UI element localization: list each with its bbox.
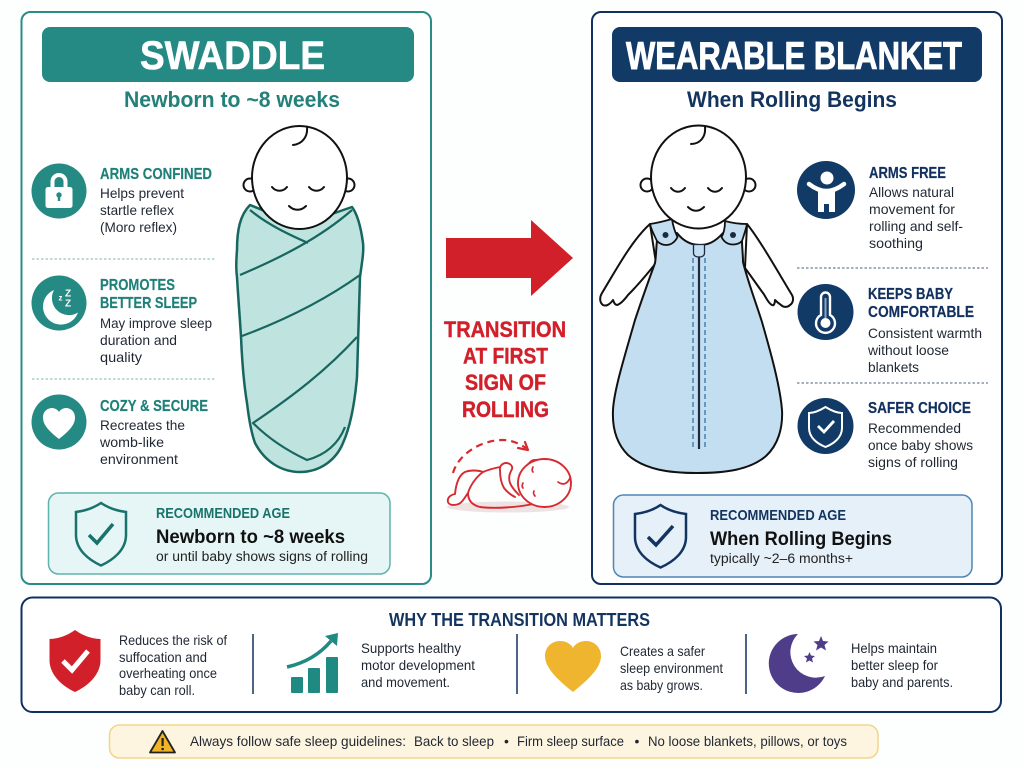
recommended age: swaddle <box>48 493 390 574</box>
transition message: AT FIRST <box>463 344 548 368</box>
recommended age: wearable blanket: RECOMMENDED AGE <box>710 507 846 524</box>
benefit: arms free: Allows natural <box>869 184 954 200</box>
benefit: safer choice <box>868 400 973 470</box>
illustration: baby in sleep sack <box>600 126 793 473</box>
benefit: safer choice: Recommended <box>868 420 961 436</box>
reason: reduces risk: suffocation and <box>119 649 207 665</box>
transition message: ROLLING <box>462 397 549 422</box>
benefit: keeps baby comfortable: COMFORTABLE <box>868 304 974 321</box>
recommended age: swaddle: RECOMMENDED AGE <box>156 505 290 522</box>
wearable blanket header banner <box>612 27 982 82</box>
benefit: arms free: ARMS FREE <box>869 165 946 182</box>
reason: motor development: and movement. <box>361 674 450 690</box>
reason: motor development <box>361 640 475 690</box>
wearable blanket subtitle: When Rolling Begins <box>687 87 897 112</box>
transition message: SIGN OF <box>465 370 546 395</box>
sack body <box>613 233 782 473</box>
callout: safe sleep guidelines: • <box>504 733 509 749</box>
benefit: cozy and secure <box>99 398 208 467</box>
section heading: WHY THE TRANSITION MATTERS <box>389 610 650 630</box>
icon: moon and zzz <box>32 276 86 330</box>
benefit: arms confined: (Moro reflex) <box>100 219 177 235</box>
callout: safe sleep guidelines: Always follow safe sleep guidelines: <box>190 733 406 749</box>
benefit: safer choice: SAFER CHOICE <box>868 400 971 417</box>
zipper <box>693 244 705 449</box>
reason: motor development: motor development <box>361 657 475 673</box>
illustration: baby rolling <box>447 440 571 512</box>
reason: motor development: Supports healthy <box>361 640 461 656</box>
reason: reduces risk: baby can roll. <box>119 682 195 698</box>
benefit: arms free: soothing <box>869 235 923 251</box>
benefit: arms free <box>869 165 963 251</box>
swaddle header banner <box>42 27 414 82</box>
transition message: TRANSITION <box>444 317 566 342</box>
straps and buttons <box>650 219 747 245</box>
reason: better sleep <box>851 640 953 690</box>
icon: warning triangle <box>150 731 175 752</box>
benefit: cozy and secure: Recreates the <box>100 417 185 433</box>
reason: safer environment: sleep environment <box>620 660 723 676</box>
arrow: transition <box>446 220 573 296</box>
callout: safe sleep guidelines: • <box>634 733 640 749</box>
benefit: promotes better sleep: quality <box>100 349 142 365</box>
arms <box>600 224 793 307</box>
callout: safe sleep guidelines: Back to sleep <box>414 733 494 749</box>
reason: reduces risk: Reduces the risk of <box>119 632 227 648</box>
transition message <box>444 317 566 422</box>
benefit: arms confined: startle reflex <box>100 202 174 218</box>
baby head <box>244 126 354 229</box>
benefit: keeps baby comfortable <box>867 286 982 375</box>
benefit: cozy and secure: environment <box>100 451 178 467</box>
icon: growth chart <box>287 633 338 693</box>
reason: reduces risk <box>119 632 227 698</box>
icon: red shield <box>50 630 100 692</box>
reason: safer environment: Creates a safer <box>620 643 705 659</box>
benefit: arms confined: Helps prevent <box>100 185 184 201</box>
benefit: keeps baby comfortable: without loose <box>867 342 949 358</box>
benefit: keeps baby comfortable: KEEPS BABY <box>868 286 953 303</box>
icon: heart <box>32 394 86 450</box>
icon: shield <box>798 398 854 454</box>
benefit: arms confined <box>100 166 212 235</box>
baby head <box>640 126 756 228</box>
reason: better sleep: Helps maintain <box>851 640 937 656</box>
reason: better sleep: better sleep for <box>851 657 938 673</box>
benefit: arms free: rolling and self- <box>869 218 963 234</box>
swaddle header banner: SWADDLE <box>140 34 325 78</box>
benefit: arms free: movement for <box>869 201 955 217</box>
reason: safer environment: as baby grows. <box>620 677 703 693</box>
callout: safe sleep guidelines <box>110 725 878 758</box>
reason: reduces risk: overheating once <box>119 665 217 681</box>
reason: better sleep: baby and parents. <box>851 674 953 690</box>
icon: purple moon and stars <box>769 634 828 693</box>
icon: moon and zzz: Z <box>65 288 71 300</box>
benefit: keeps baby comfortable: Consistent warmth <box>868 325 982 341</box>
benefit: keeps baby comfortable: blankets <box>868 359 919 375</box>
benefit: safer choice: signs of rolling <box>868 454 958 470</box>
icon: moon and zzz: z <box>58 294 62 302</box>
benefit: cozy and secure: womb-like <box>99 434 164 450</box>
recommended age: wearable blanket: typically ~2–6 months+ <box>710 551 853 566</box>
panel: swaddle <box>22 12 431 584</box>
icon: moon and zzz: Z <box>65 298 71 310</box>
recommended age: swaddle: Newborn to ~8 weeks <box>156 526 345 548</box>
swaddle subtitle: Newborn to ~8 weeks <box>124 87 340 112</box>
benefit: safer choice: once baby shows <box>868 437 973 453</box>
icon: thermometer <box>798 284 854 340</box>
benefit: promotes better sleep <box>100 277 212 365</box>
benefit: promotes better sleep: duration and <box>100 332 177 348</box>
callout: safe sleep guidelines: Firm sleep surface <box>517 733 624 749</box>
icon: child with arms up <box>797 161 855 219</box>
illustration: swaddled baby <box>236 126 363 472</box>
panel: wearable blanket <box>592 12 1002 584</box>
recommended age: swaddle: or until baby shows signs of rolling <box>156 549 368 564</box>
recommended age: wearable blanket: When Rolling Begins <box>710 528 892 550</box>
icon: yellow heart <box>545 641 601 692</box>
recommended age: wearable blanket <box>614 495 972 577</box>
benefit: promotes better sleep: May improve sleep <box>100 315 212 331</box>
benefit: promotes better sleep: PROMOTES <box>100 277 175 294</box>
benefit: cozy and secure: COZY & SECURE <box>100 398 208 415</box>
benefit: promotes better sleep: BETTER SLEEP <box>100 295 197 312</box>
callout: safe sleep guidelines: No loose blankets, pillows, or toys <box>648 733 847 749</box>
icon: lock <box>32 164 86 218</box>
benefit: arms confined: ARMS CONFINED <box>100 166 212 183</box>
reason: safer environment <box>620 643 723 693</box>
panel: why the transition matters <box>22 598 1001 712</box>
